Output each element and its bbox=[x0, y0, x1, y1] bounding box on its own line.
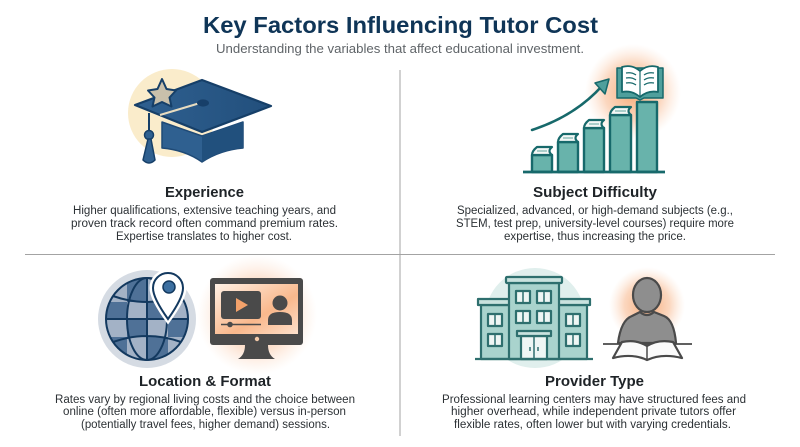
icon: graduation cap bbox=[128, 69, 271, 163]
text: subject difficulty description bbox=[456, 205, 734, 243]
text: experience description: Higher qualifications, extensive teaching years, and bbox=[73, 205, 336, 217]
text: provider type description: flexible rates, often lower but with varying credentials. bbox=[454, 419, 731, 431]
icon: person reading a book bbox=[603, 267, 692, 360]
text: location and format description: Rates vary by regional living costs and the choice between bbox=[55, 394, 355, 406]
panel: location and format bbox=[55, 255, 355, 431]
heading: subject difficulty: Subject Difficulty bbox=[533, 184, 658, 201]
text: experience description bbox=[71, 205, 338, 243]
heading: provider type: Provider Type bbox=[545, 373, 644, 390]
text: provider type description bbox=[442, 394, 746, 431]
icon: school building bbox=[475, 268, 593, 368]
icon: globe with map pin bbox=[98, 270, 196, 368]
text: location and format description bbox=[55, 394, 355, 431]
heading: experience: Experience bbox=[165, 184, 244, 201]
icon: book stack bars with arrow bbox=[523, 44, 681, 172]
text: subject difficulty description: expertise, thus increasing the price. bbox=[504, 231, 686, 243]
panel: subject difficulty bbox=[456, 44, 734, 243]
text: subject difficulty description: STEM, test prep, university-level courses) require more bbox=[456, 218, 734, 230]
subtitle: Understanding the variables that affect educational investment. bbox=[216, 41, 584, 56]
text: subject difficulty description: Specialized, advanced, or high-demand subjects (e.g., bbox=[457, 205, 733, 217]
text: provider type description: higher overhead, while independent private tutors offer bbox=[451, 406, 736, 418]
text: experience description: proven track record often command premium rates. bbox=[71, 218, 338, 230]
text: location and format description: online (often more affordable, flexible) versus in-person bbox=[63, 406, 346, 418]
text: location and format description: (potentially travel fees, higher demand) sessions. bbox=[81, 419, 330, 431]
panel: experience bbox=[71, 69, 338, 243]
icon: monitor with video lesson bbox=[197, 255, 317, 375]
text: provider type description: Professional learning centers may have structured fees and bbox=[442, 394, 746, 406]
panel: provider type bbox=[442, 267, 746, 431]
heading: location and format: Location & Format bbox=[139, 373, 271, 390]
title: Key Factors Influencing Tutor Cost bbox=[203, 12, 598, 38]
text: experience description: Expertise translates to higher cost. bbox=[116, 231, 292, 243]
